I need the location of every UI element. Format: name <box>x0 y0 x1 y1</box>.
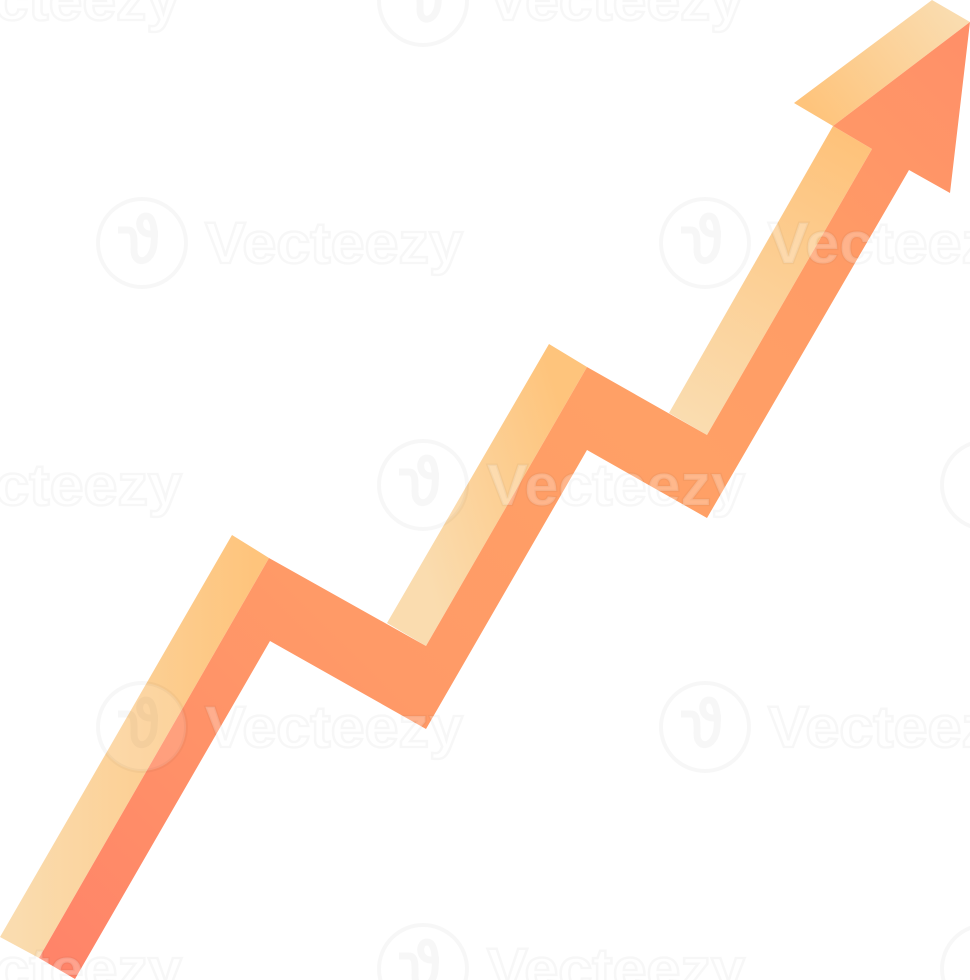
watermark pattern: Vecteezy <box>487 453 745 518</box>
arrow: light back face, lower segment <box>0 535 269 958</box>
arrow: light back face, middle segment <box>387 344 587 646</box>
watermark pattern: Vecteezy <box>205 695 463 760</box>
arrow: light back face, arrowhead <box>794 0 970 126</box>
watermark pattern: Vecteezy <box>205 211 463 276</box>
arrow: light back face, upper segment <box>669 126 872 435</box>
